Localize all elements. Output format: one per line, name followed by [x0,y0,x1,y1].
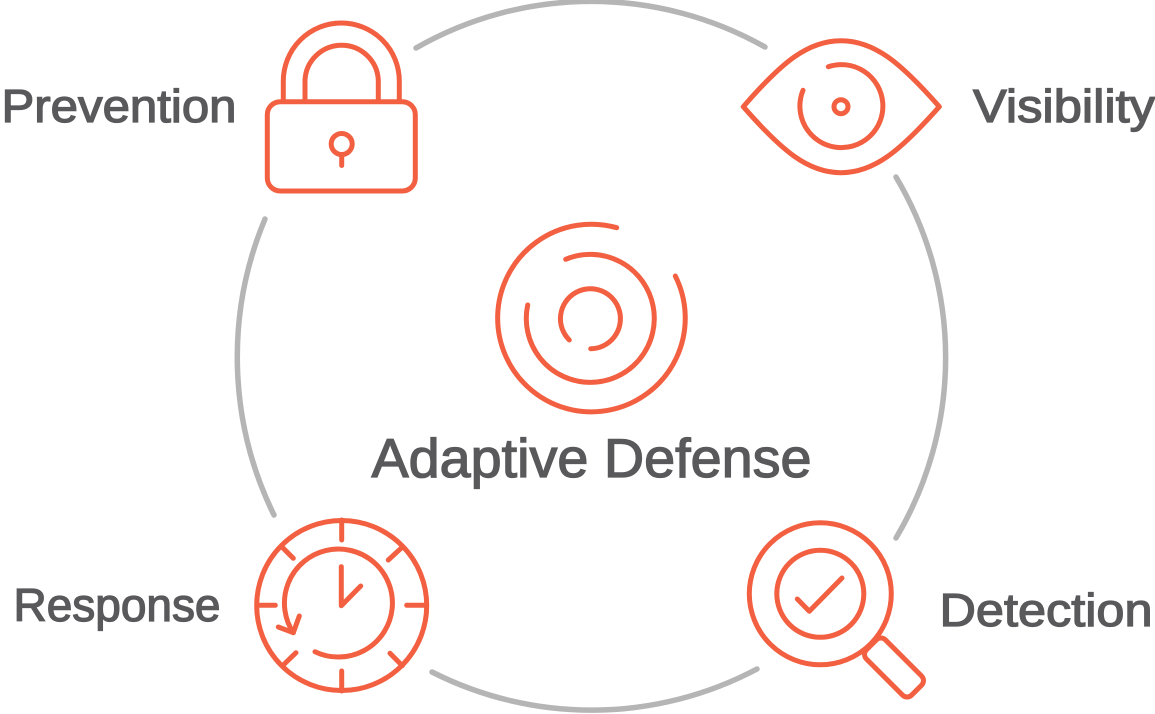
label: Prevention: Prevention [2,80,237,132]
heading: Adaptive Defense: Adaptive Defense [372,427,812,489]
icon: padlock [267,23,415,191]
cycle ring: grey arcs linking the four stages [237,1,946,710]
icon: eye [743,41,939,173]
icon: adaptive defense concentric spiral [498,224,685,412]
label: Visibility: Visibility [973,80,1155,132]
label: Detection: Detection [940,584,1152,636]
label: Response: Response [14,579,220,631]
icon: magnifying glass with check mark [749,523,926,700]
icon: clock with counter-clockwise arrow [257,520,427,691]
